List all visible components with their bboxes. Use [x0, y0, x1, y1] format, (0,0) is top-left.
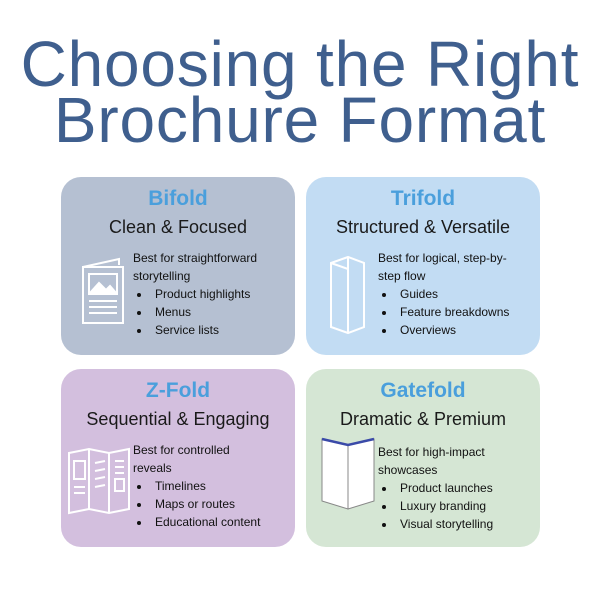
title	[21, 28, 579, 156]
text: bifold: Menus	[155, 305, 191, 319]
text: bifold: Product highlights	[155, 287, 250, 301]
title: Brochure Format	[54, 84, 546, 156]
text: z-fold: Maps or routes	[155, 497, 235, 511]
icon: trifold brochure	[330, 256, 365, 334]
text: trifold: Overviews	[400, 323, 456, 337]
heading: gatefold: Gatefold	[380, 379, 466, 402]
text: gatefold: Luxury branding	[400, 499, 486, 513]
text: trifold	[378, 251, 509, 337]
icon: bifold brochure	[82, 258, 124, 324]
text: z-fold	[133, 443, 260, 529]
subtitle: trifold: Structured & Versatile	[336, 217, 510, 237]
subtitle: gatefold: Dramatic & Premium	[340, 409, 506, 429]
text: trifold: Best for logical, step-by-step flow	[378, 251, 507, 283]
text: z-fold: Timelines	[155, 479, 206, 493]
panel: gatefold	[306, 369, 540, 547]
heading: z-fold: Z-Fold	[146, 379, 210, 402]
text: trifold: Guides	[400, 287, 438, 301]
panel: trifold	[306, 177, 540, 355]
text: gatefold	[378, 445, 493, 531]
subtitle: bifold: Clean & Focused	[109, 217, 247, 237]
text: gatefold: Visual storytelling	[400, 517, 493, 531]
text: trifold: Feature breakdowns	[400, 305, 509, 319]
text: z-fold: Educational content	[155, 515, 260, 529]
heading: bifold: Bifold	[148, 187, 208, 210]
title: Choosing the Right	[21, 28, 579, 100]
panel: z-fold	[61, 369, 295, 547]
text: z-fold: Best for controlled reveals	[133, 443, 230, 475]
subtitle: z-fold: Sequential & Engaging	[86, 409, 270, 429]
text: bifold	[133, 251, 257, 337]
icon: gatefold brochure	[322, 438, 374, 510]
icon: z-fold brochure	[68, 448, 130, 514]
text: gatefold: Best for high-impact showcases	[378, 445, 485, 477]
text: bifold: Best for straightforward storytelling	[133, 251, 257, 283]
heading: trifold: Trifold	[391, 187, 455, 210]
text: bifold: Service lists	[155, 323, 219, 337]
panel: bifold	[61, 177, 295, 355]
text: gatefold: Product launches	[400, 481, 493, 495]
